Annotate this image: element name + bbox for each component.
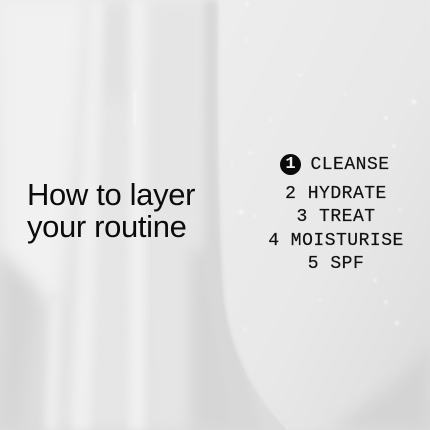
step 1 number badge: 1	[285, 155, 296, 174]
title	[27, 177, 195, 244]
step 5: 5 SPF	[308, 254, 364, 274]
step 1 label: CLEANSE	[310, 155, 390, 175]
step 4: 4 MOISTURISE	[268, 231, 404, 251]
step 1 number badge	[280, 154, 301, 175]
step 2: 2 HYDRATE	[285, 184, 387, 204]
title: How to layer	[27, 177, 195, 212]
step list	[268, 154, 404, 274]
right panel of cream	[220, 0, 430, 430]
title: your routine	[27, 209, 187, 244]
step 3: 3 TREAT	[296, 207, 376, 227]
